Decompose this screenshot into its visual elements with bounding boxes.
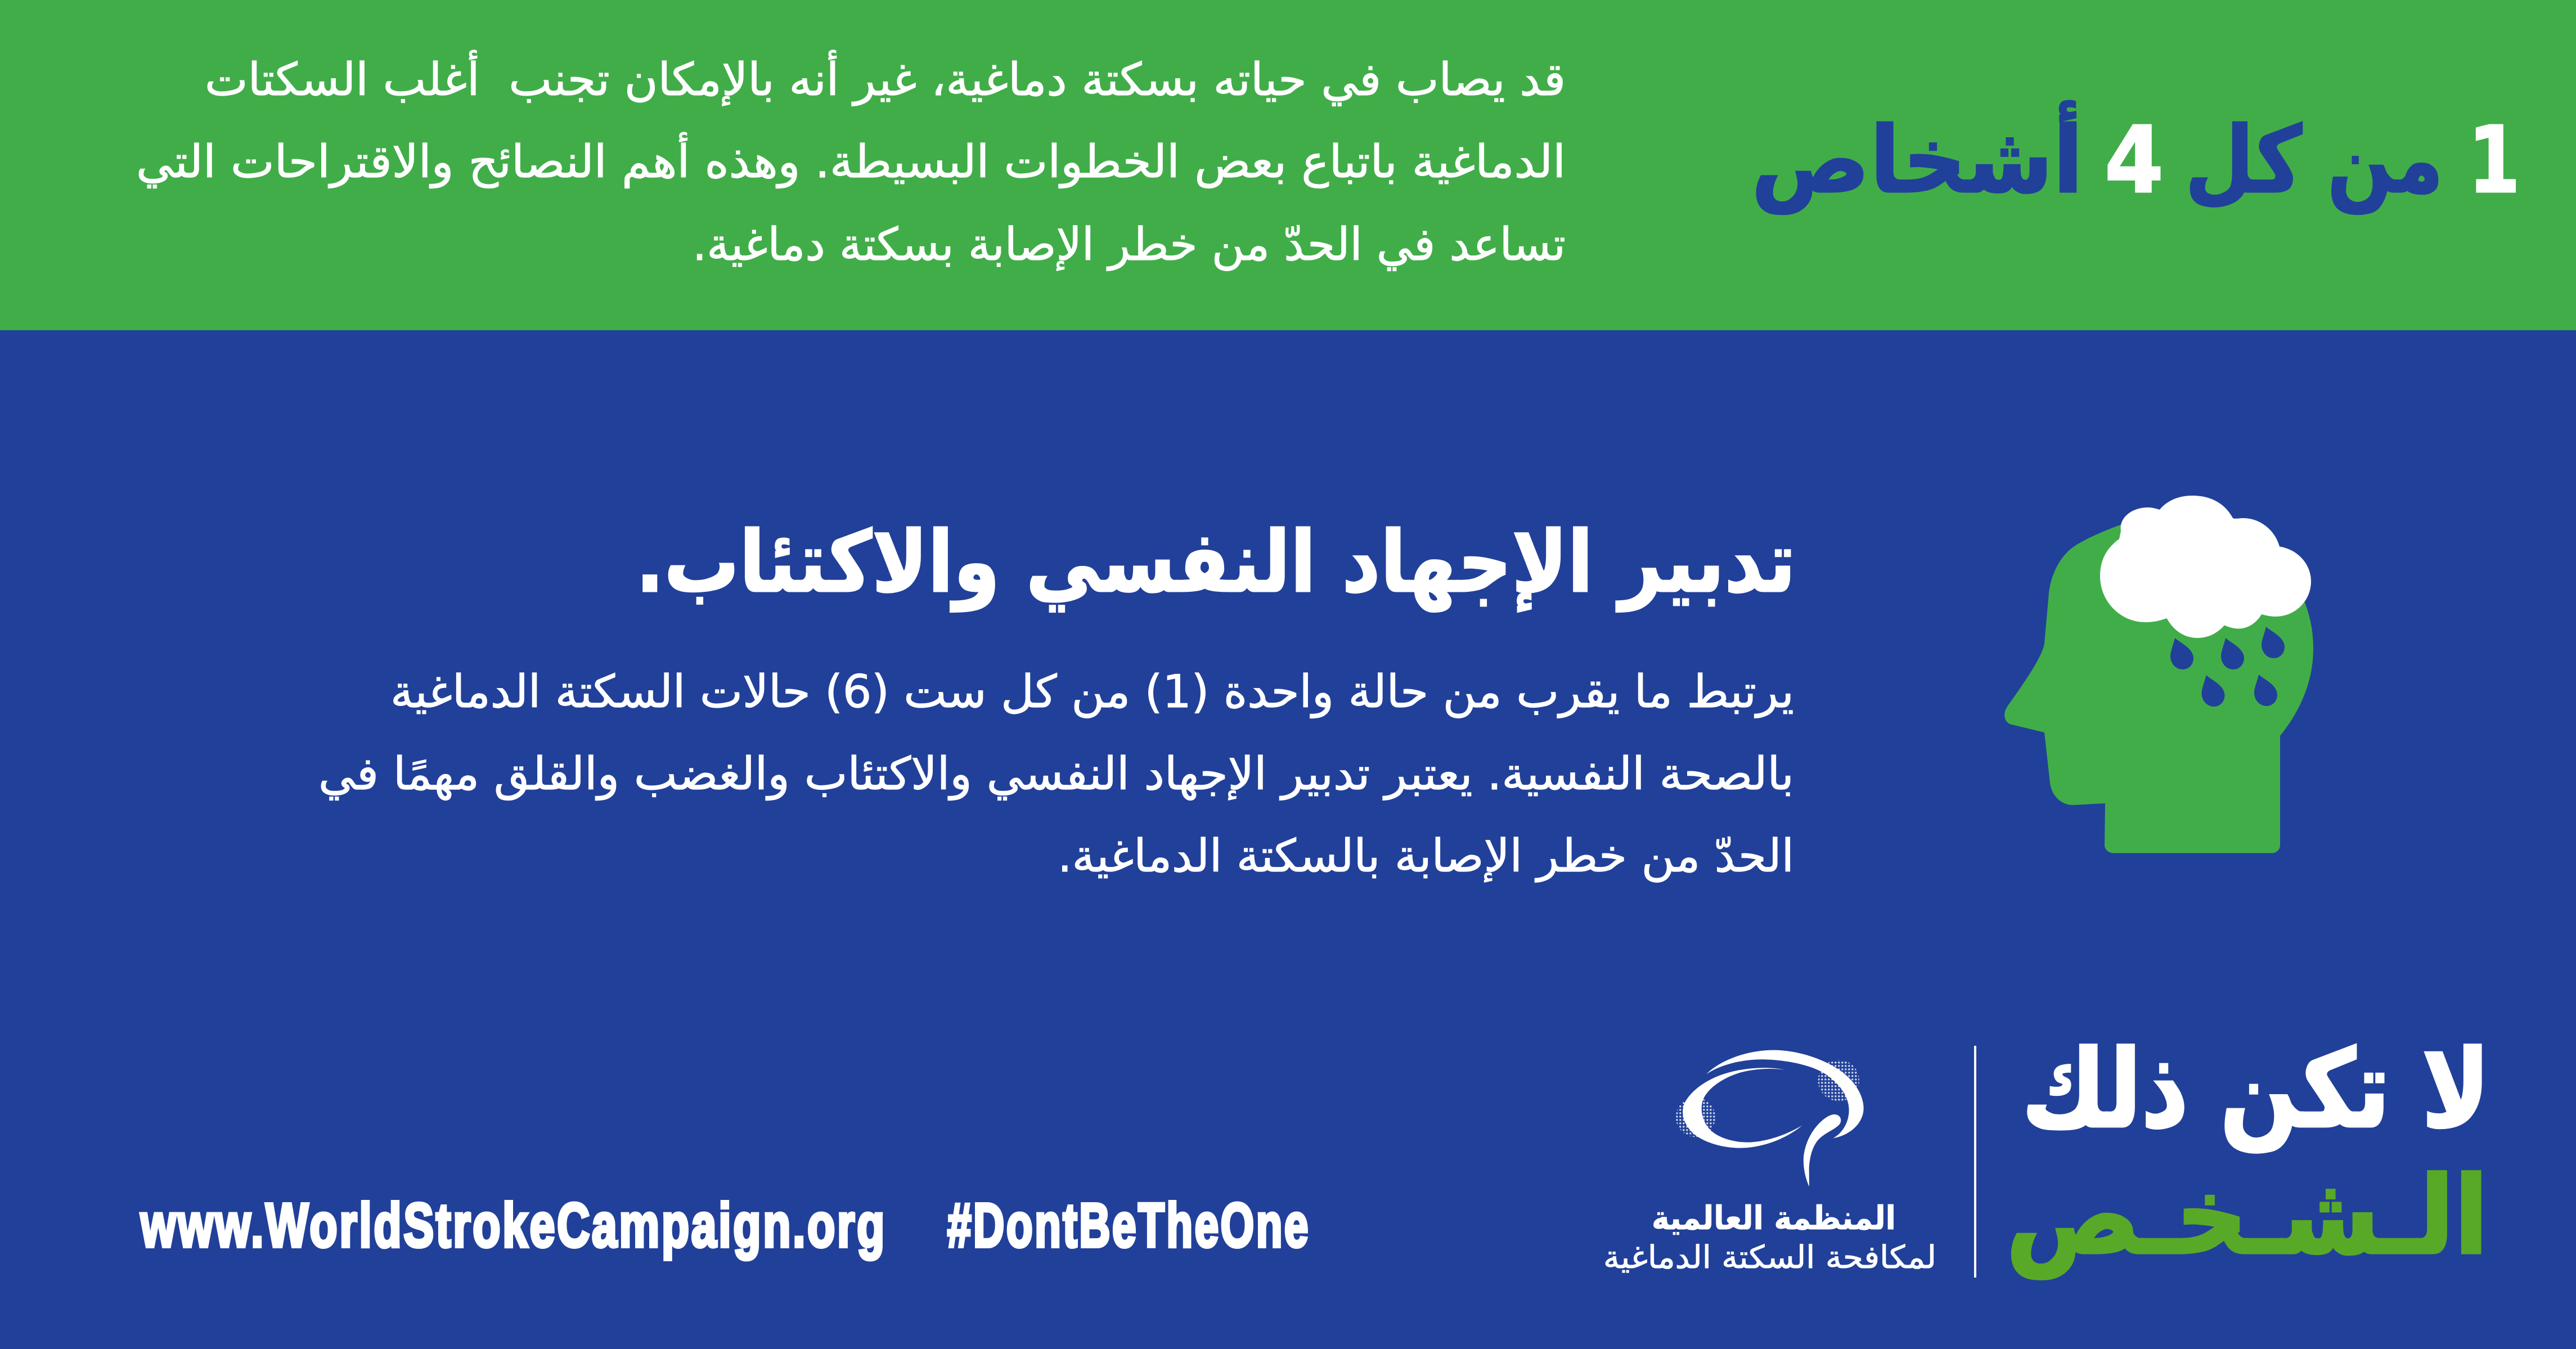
- intro text block: الدماغية باتباع بعض الخطوات البسيطة. وهذه أهم النصائح والاقتراحات التي: [136, 132, 1566, 188]
- hashtag: #DontBeTheOne: [947, 1191, 1310, 1260]
- slogan: الـشـخـص: [2006, 1154, 2488, 1279]
- body text block: [318, 665, 1794, 883]
- icon: head with rain cloud: [2004, 496, 2313, 853]
- main heading: تدبير الإجهاد النفسي والاكتئاب.: [636, 514, 1796, 612]
- logo: World Stroke Organization: [1603, 1050, 1936, 1276]
- logo mark: [1676, 1050, 1864, 1186]
- website url: www.WorldStrokeCampaign.org: [140, 1191, 887, 1260]
- intro text block: [136, 50, 1566, 271]
- logo name: لمكافحة السكتة الدماغية: [1603, 1239, 1936, 1276]
- divider: [1974, 1046, 1976, 1278]
- intro text block: قد يصاب في حياته بسكتة دماغية، غير أنه بالإمكان تجنب أغلب السكتات: [205, 50, 1566, 106]
- cloud: [2100, 496, 2311, 638]
- heading: 1 in 4 people: كل: [2185, 107, 2302, 214]
- heading: 1 in 4 people: أشخاص: [1751, 101, 2083, 214]
- body text block: بالصحة النفسية. يعتبر تدبير الإجهاد النفسي والاكتئاب والغضب والقلق مهمًا في: [318, 748, 1794, 801]
- heading: 1 in 4 people: [1751, 101, 2520, 214]
- rain drops: [2170, 627, 2285, 707]
- logo name: [1603, 1199, 1936, 1276]
- body text block: الحدّ من خطر الإصابة بالسكتة الدماغية.: [1058, 830, 1794, 883]
- panel: green top banner: [0, 0, 2576, 330]
- head silhouette: [2004, 524, 2313, 853]
- body text block: يرتبط ما يقرب من حالة واحدة (1) من كل ست (6) حالات السكتة الدماغية: [390, 665, 1794, 718]
- logo name: المنظمة العالمية: [1652, 1199, 1896, 1237]
- heading: 1 in 4 people: 4: [2105, 107, 2164, 214]
- heading: 1 in 4 people: من: [2327, 107, 2443, 214]
- intro text block: تساعد في الحدّ من خطر الإصابة بسكتة دماغية.: [693, 218, 1566, 271]
- heading: 1 in 4 people: 1: [2468, 107, 2520, 214]
- slogan: لا تكن ذلك: [2022, 1027, 2490, 1153]
- slogan: [2006, 1027, 2490, 1279]
